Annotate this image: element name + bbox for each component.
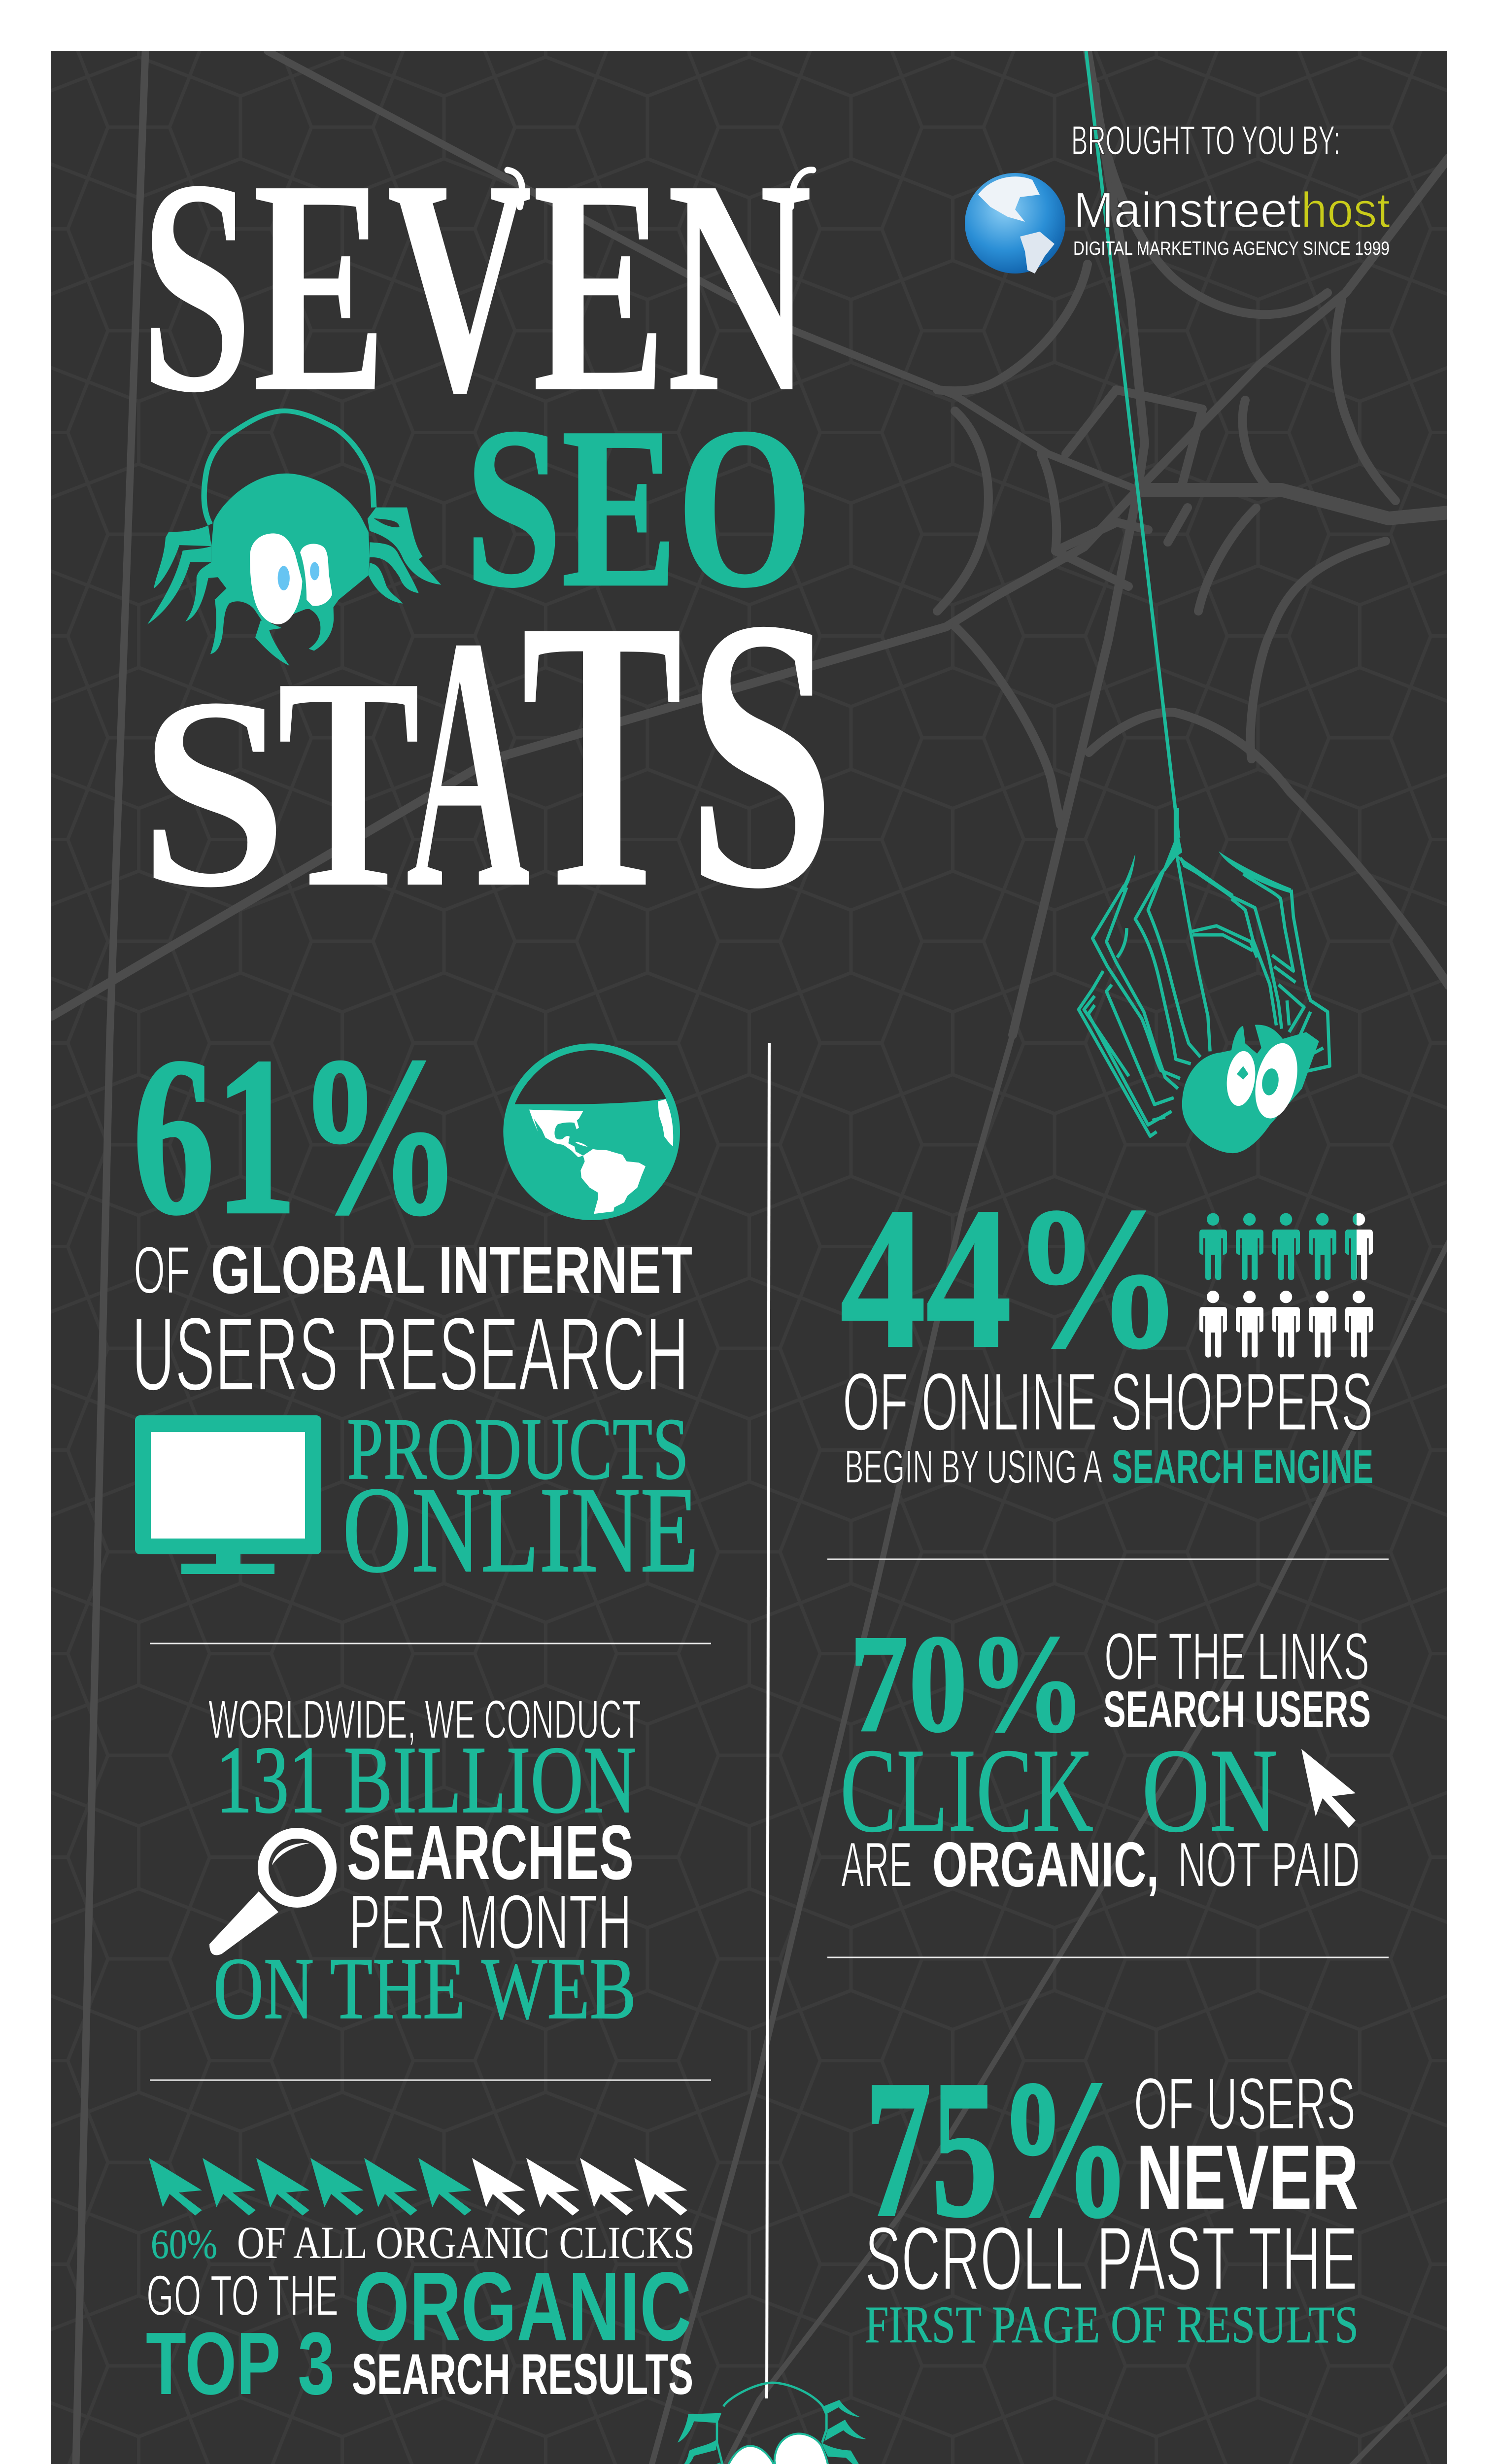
text: online: ONLINE [342,1462,699,1598]
sponsor block [965,117,1390,274]
text: are organic not paid: NOT PAID [1178,1829,1360,1900]
big number 70%: 70% [850,1606,1086,1761]
text: are organic not paid: ORGANIC, [932,1829,1159,1900]
title word: STATS [139,538,835,969]
text: on the web: ON THE WEB [213,1939,636,2037]
title word: SEVEN: SEVEN [140,116,812,456]
stat: 70% click on organic [840,1606,1371,1900]
text: never: NEVER [1136,2126,1359,2228]
title word: STATS: T [521,540,683,968]
text: click on: ON [1142,1724,1278,1857]
text: begin by using a search engine: SEARCH ENGINE [1112,1440,1373,1493]
title word: STATS: S [687,538,835,969]
big number 75%: 75% [865,2040,1131,2258]
icon row: ten cursors [149,2158,687,2216]
text: of global internet [134,1232,692,1307]
big number 61%: 61% [133,1010,462,1262]
text: of global internet: GLOBAL INTERNET [211,1232,692,1307]
icon: magnifying glass [209,1833,331,1955]
title: SEVEN SEO STATS [139,116,835,969]
text: top 3: TOP 3 [146,2314,335,2413]
logo wordmark: host [1301,183,1390,238]
text: worldwide we conduct: WORLDWIDE, WE CONDUCT [208,1689,641,1750]
title word: STATS: T [277,615,420,951]
icon: center spider [676,2383,866,2464]
stat: 131 billion searches [208,1689,641,2037]
icon: globe logo [965,173,1065,274]
text: per month: PER MONTH [349,1879,632,1965]
text: click on: CLICK [840,1724,1093,1857]
title word: SEO: SEO [465,380,812,634]
stat: 61% of global internet users [132,1010,699,1598]
icon: monitor [135,1415,321,1574]
icon: title spider with blue eyes [147,411,441,666]
logo tagline: DIGITAL MARKETING AGENCY SINCE 1999 [1073,238,1390,259]
text: are organic not paid: ARE [841,1829,912,1900]
icon: cursor [1301,1749,1356,1828]
text: searches: SEARCHES [347,1810,634,1896]
title word: STATS: S [139,641,287,944]
text: 131 billion: 131 BILLION [216,1727,636,1833]
text: 60% of all organic clicks: 60% [151,2221,217,2267]
divider lines for left column [150,1643,711,2080]
text: begin by using a search engine: BEGIN BY USING A [845,1440,1102,1493]
text: search results: SEARCH RESULTS [352,2342,693,2406]
text: users research: USERS RESEARCH [132,1296,689,1413]
title word: SEVEN [140,116,813,456]
text: go to the: GO TO THE [146,2263,339,2327]
text: first page of results: FIRST PAGE OF RESULTS [865,2296,1359,2354]
text: are organic not paid [841,1829,1360,1900]
teal thread from top to hanging spider [1086,51,1179,838]
text: products: PRODUCTS [347,1400,689,1498]
title word: STATS: A [406,562,530,963]
icon: people grid [1199,1213,1373,1358]
text: organic: ORGANIC [354,2252,691,2361]
logo wordmark: Mainstreet [1073,183,1301,238]
icon: teal globe [503,1043,680,1220]
vertical column divider [767,1043,769,2398]
icon: hanging spider [1079,808,1330,1153]
stat: 60% of organic clicks [146,2158,695,2413]
text: of users: OF USERS [1134,2062,1356,2145]
stat: 75% never scroll [865,2040,1359,2354]
text: 60% of all organic clicks: OF ALL ORGANIC CLICKS [237,2218,695,2268]
text: of global internet: OF [134,1232,190,1307]
big number 44%: 44% [840,1166,1183,1390]
divider lines for right column [827,1559,1389,1957]
stat: 44% of online shoppers [842,1210,1373,1483]
